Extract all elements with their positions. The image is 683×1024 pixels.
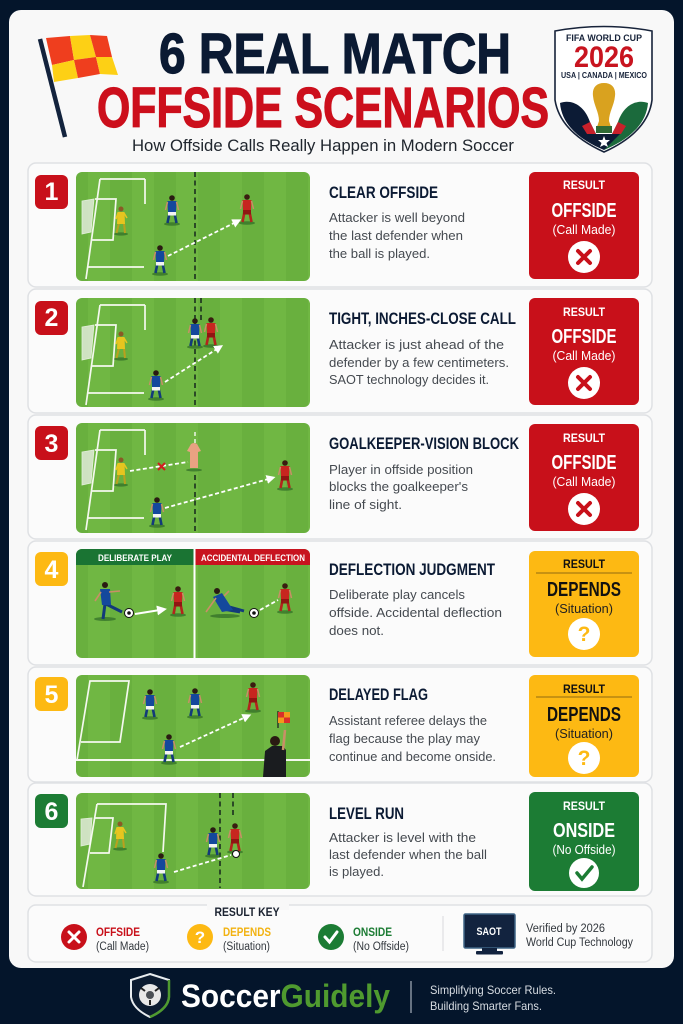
key: onside: (No Offside) xyxy=(353,941,409,953)
scenario 1 description: the last defender when xyxy=(329,228,463,243)
result box 5: DEPENDS xyxy=(547,704,621,726)
icon: SAOT monitor xyxy=(464,914,515,954)
scenario 2 description: Attacker is just ahead of the xyxy=(329,337,504,352)
result box 3: OFFSIDE xyxy=(552,452,616,474)
result box 2: (Call Made) xyxy=(552,348,616,363)
scenario 6 description: is played. xyxy=(329,864,384,879)
number badge 3 xyxy=(35,426,68,460)
result box 5 xyxy=(529,675,639,777)
key: offside: (Call Made) xyxy=(96,941,149,953)
number badge 1: 1 xyxy=(45,178,59,206)
badge: FIFA World Cup 2026 shield: 2026 xyxy=(574,41,634,74)
pitch diagram 4: DELIBERATE PLAY xyxy=(98,553,172,563)
icon: offside flag xyxy=(40,35,118,137)
scenario 4 heading: DEFLECTION JUDGMENT xyxy=(329,560,495,579)
result box 4: RESULT xyxy=(563,557,606,571)
number badge 4: 4 xyxy=(45,556,59,584)
scenario 4 description: Deliberate play cancels xyxy=(329,587,466,602)
scenario 3 description: Player in offside position xyxy=(329,462,473,477)
scenario 4 description: does not. xyxy=(329,623,384,638)
key: depends: DEPENDS xyxy=(223,925,271,939)
verified text: Verified by 2026 xyxy=(526,923,605,935)
result box 4: DEPENDS xyxy=(547,579,621,601)
panel: scenario 2 tight call xyxy=(28,289,652,413)
scenario 3 heading: GOALKEEPER-VISION BLOCK xyxy=(329,434,520,453)
scenario 1 heading: CLEAR OFFSIDE xyxy=(329,183,438,202)
scenario 4 description: offside. Accidental deflection xyxy=(329,605,502,620)
panel: scenario 5 delayed flag xyxy=(28,667,652,782)
result box 3: (Call Made) xyxy=(552,474,616,489)
result box 1: RESULT xyxy=(563,178,606,192)
footer tagline: Building Smarter Fans. xyxy=(430,999,542,1013)
key: depends xyxy=(187,924,271,953)
pitch diagram 4: ACCIDENTAL DEFLECTION xyxy=(201,553,305,563)
scenario 5 description: Assistant referee delays the xyxy=(329,713,487,728)
scenario 1 description xyxy=(329,210,465,261)
scenario 6 description xyxy=(329,830,487,879)
icon: SAOT monitor: SAOT xyxy=(476,926,502,938)
result box 6: RESULT xyxy=(563,799,606,813)
pitch diagram 2 xyxy=(76,298,310,407)
scenario 6 description: Attacker is level with the xyxy=(329,830,476,845)
number badge 1 xyxy=(35,175,68,209)
scenario 1 description: Attacker is well beyond xyxy=(329,210,465,225)
wordmark: SoccerGuidely xyxy=(181,978,390,1014)
footer tagline xyxy=(430,983,556,1013)
result box 6: ONSIDE xyxy=(553,820,615,842)
pitch diagram 5 xyxy=(76,675,310,777)
key: offside: OFFSIDE xyxy=(96,925,140,939)
panel: scenario 4 deflection judgment xyxy=(28,541,652,665)
result box 2: RESULT xyxy=(563,305,606,319)
key: depends: (Situation) xyxy=(223,941,270,953)
scenario 2 description: defender by a few centimeters. xyxy=(329,355,509,370)
pitch diagram 1 xyxy=(76,172,310,281)
verified text: World Cup Technology xyxy=(526,937,633,949)
result box 4: (Situation) xyxy=(555,601,613,616)
scenario 2 heading: TIGHT, INCHES-CLOSE CALL xyxy=(329,309,516,328)
badge: FIFA World Cup 2026 shield: USA | CANADA | MEXICO xyxy=(561,70,647,80)
panel: scenario 3 goalkeeper vision block xyxy=(28,415,652,539)
result box 2 xyxy=(529,298,639,405)
title xyxy=(97,22,549,140)
number badge 2 xyxy=(35,301,68,335)
result box 2: OFFSIDE xyxy=(552,326,616,348)
pitch diagram 3 xyxy=(76,423,310,533)
scenario 4 description xyxy=(329,587,502,638)
footer: SoccerGuidely logo xyxy=(131,974,390,1017)
panel: scenario 1 clear offside xyxy=(28,163,652,287)
scenario 2 description: SAOT technology decides it. xyxy=(329,372,489,387)
key: onside: ONSIDE xyxy=(353,925,392,939)
result box 3 xyxy=(529,424,639,531)
panel: result key xyxy=(28,900,652,962)
scenario 5 heading: DELAYED FLAG xyxy=(329,685,428,704)
scenario 5 description: continue and become onside. xyxy=(329,749,496,764)
scenario 5 description xyxy=(329,713,496,764)
scenario 3 description xyxy=(329,462,473,512)
footer tagline: Simplifying Soccer Rules. xyxy=(430,983,556,997)
badge: FIFA World Cup 2026 shield xyxy=(555,26,652,152)
result box 6: (No Offside) xyxy=(552,842,616,857)
key: offside xyxy=(61,924,149,953)
pitch diagram 4 xyxy=(76,549,310,658)
result box 6 xyxy=(529,792,639,891)
number badge 5: 5 xyxy=(45,681,59,709)
number badge 3: 3 xyxy=(45,430,58,458)
number badge 6: 6 xyxy=(45,798,58,826)
result box 5: RESULT xyxy=(563,682,606,696)
scenario 6 heading: LEVEL RUN xyxy=(329,804,404,823)
result box 3: RESULT xyxy=(563,431,606,445)
result box 1: (Call Made) xyxy=(552,222,616,237)
title: OFFSIDE SCENARIOS xyxy=(97,76,549,140)
badge: FIFA World Cup 2026 shield: FIFA WORLD CUP xyxy=(566,33,643,44)
key: depends: ? xyxy=(195,928,205,947)
result box 1 xyxy=(529,172,639,279)
result box 4 xyxy=(529,551,639,657)
verified text xyxy=(526,923,633,949)
scenario 5 description: flag because the play may xyxy=(329,731,480,746)
key: onside xyxy=(318,924,409,953)
subtitle: How Offside Calls Really Happen in Modern Soccer xyxy=(132,136,514,155)
result box 5: (Situation) xyxy=(555,726,613,741)
number badge 6 xyxy=(35,794,68,828)
title: 6 REAL MATCH xyxy=(159,22,511,86)
scenario 3 description: line of sight. xyxy=(329,497,402,512)
number badge 5 xyxy=(35,677,68,711)
pitch diagram 6 xyxy=(76,793,310,889)
result box 1: OFFSIDE xyxy=(552,200,616,222)
scenario 2 description xyxy=(329,337,509,387)
number badge 4 xyxy=(35,552,68,586)
scenario 6 description: last defender when the ball xyxy=(329,847,487,862)
key heading: RESULT KEY xyxy=(214,907,280,919)
scenario 1 description: the ball is played. xyxy=(329,246,430,261)
number badge 2: 2 xyxy=(45,304,58,332)
scenario 3 description: blocks the goalkeeper's xyxy=(329,479,469,494)
icon: shield with ball xyxy=(131,974,169,1017)
panel: scenario 6 level run xyxy=(28,783,652,896)
